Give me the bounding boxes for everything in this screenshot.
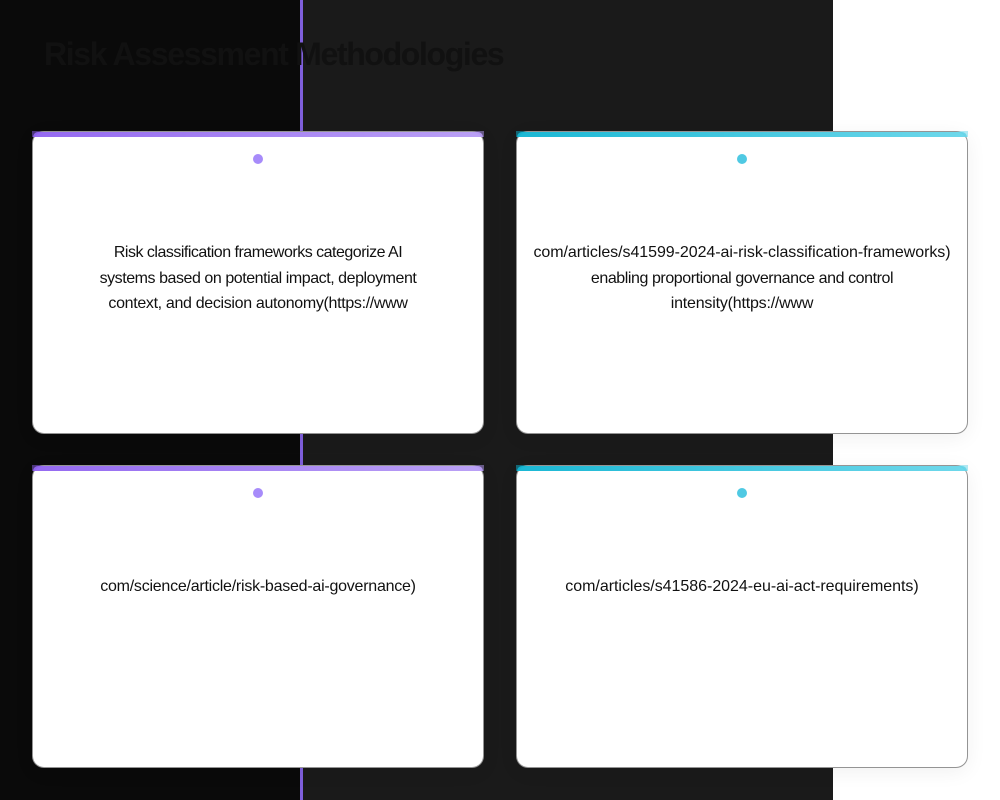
background panel: left dark column bbox=[0, 0, 300, 800]
text block: card 1 description bbox=[100, 244, 417, 312]
icon: cyan dot bbox=[737, 488, 747, 498]
vertical purple rule bbox=[300, 0, 303, 800]
accent bar: cyan bbox=[517, 466, 967, 471]
panel: proportional governance card bbox=[516, 131, 968, 436]
text block: card 2 description: enabling proportional governance and control bbox=[591, 270, 893, 287]
background panel: middle dark column bbox=[300, 0, 833, 800]
icon: cyan dot bbox=[737, 154, 747, 164]
accent bar: purple bbox=[33, 132, 483, 137]
text block: card 2 description bbox=[533, 244, 951, 312]
accent bar: cyan bbox=[517, 132, 967, 137]
text block: card 1 description: context, and decision autonomy(https://www bbox=[108, 295, 408, 312]
text block: card 2 description: com/articles/s41599-2024-ai-risk-classification-frameworks) bbox=[533, 244, 951, 261]
icon: purple dot bbox=[253, 154, 263, 164]
panel: EU AI Act link card bbox=[516, 465, 968, 770]
text block: card 4 description: com/articles/s41586-2024-eu-ai-act-requirements) bbox=[565, 578, 919, 595]
text block: card 3 description: com/science/article/risk-based-ai-governance) bbox=[100, 578, 416, 595]
accent bar: purple bbox=[33, 466, 483, 471]
panel: risk-based governance link card bbox=[32, 465, 484, 768]
icon: purple dot bbox=[253, 488, 263, 498]
text block: card 1 description: Risk classification frameworks categorize AI bbox=[114, 244, 402, 261]
title: Risk Assessment Methodologies bbox=[44, 36, 503, 72]
text block: card 2 description: intensity(https://www bbox=[671, 295, 813, 312]
panel: risk classification frameworks card bbox=[32, 131, 484, 434]
text block: card 1 description: systems based on potential impact, deployment bbox=[100, 270, 416, 287]
